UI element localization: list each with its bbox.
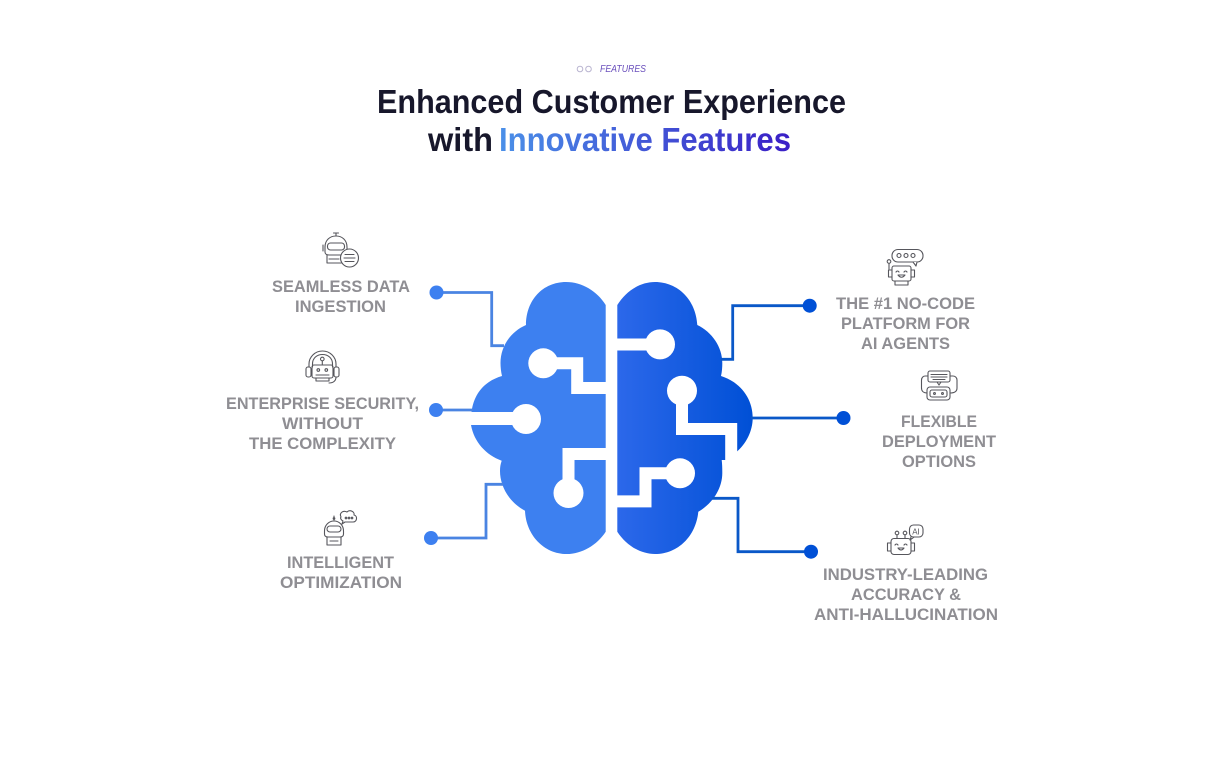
label: industry-leading accuracy: ACCURACY & [851, 586, 961, 604]
eyebrow label: features [577, 63, 646, 75]
connector: enterprise security [429, 403, 473, 417]
label: flexible deployment: FLEXIBLE [901, 413, 977, 431]
connector: no-code platform [721, 299, 817, 359]
title: Innovative Features [499, 121, 791, 158]
label: no-code platform [836, 295, 975, 353]
label: industry-leading accuracy [814, 566, 998, 624]
icon: robot with AI bubble [888, 525, 923, 554]
label: seamless data ingestion [272, 278, 410, 316]
icon: smiling robot with speech bubble [887, 250, 923, 285]
icon: robot with chat clouds [324, 511, 357, 545]
label: enterprise security: WITHOUT [282, 415, 363, 433]
label: seamless data ingestion: INGESTION [295, 298, 386, 316]
label: no-code platform: PLATFORM FOR [841, 315, 970, 333]
icon: robot with document bubble and side links [922, 371, 957, 400]
label: industry-leading accuracy: ANTI-HALLUCINATION [814, 606, 998, 624]
connector: intelligent optimization [424, 484, 503, 545]
label: intelligent optimization [280, 554, 402, 592]
title: Enhanced Customer Experience [377, 83, 846, 120]
icon: robot with AI bubble: AI [912, 528, 920, 536]
label: intelligent optimization: INTELLIGENT [287, 554, 394, 572]
title: with [427, 121, 493, 158]
label: industry-leading accuracy: INDUSTRY-LEADING [823, 566, 988, 584]
brain: right hemisphere [615, 282, 753, 554]
connector: industry-leading accuracy [712, 498, 818, 559]
label: no-code platform: AI AGENTS [861, 335, 950, 353]
label: flexible deployment: DEPLOYMENT [882, 433, 996, 451]
connector: flexible deployment [751, 411, 850, 425]
label: enterprise security: ENTERPRISE SECURITY, [226, 395, 419, 413]
label: seamless data ingestion: SEAMLESS DATA [272, 278, 410, 296]
label: flexible deployment: OPTIONS [902, 453, 976, 471]
icon: robot with headset [306, 351, 339, 383]
title [377, 83, 846, 158]
connector: seamless data ingestion [430, 286, 504, 346]
icon: robot with document bubble [323, 233, 358, 267]
label: no-code platform: THE #1 NO-CODE [836, 295, 975, 313]
eyebrow label: features: FEATURES [600, 63, 646, 75]
label: enterprise security [226, 395, 419, 453]
label: flexible deployment [882, 413, 996, 471]
label: enterprise security: THE COMPLEXITY [249, 435, 396, 453]
label: intelligent optimization: OPTIMIZATION [280, 574, 402, 592]
brain: left hemisphere [471, 282, 608, 554]
